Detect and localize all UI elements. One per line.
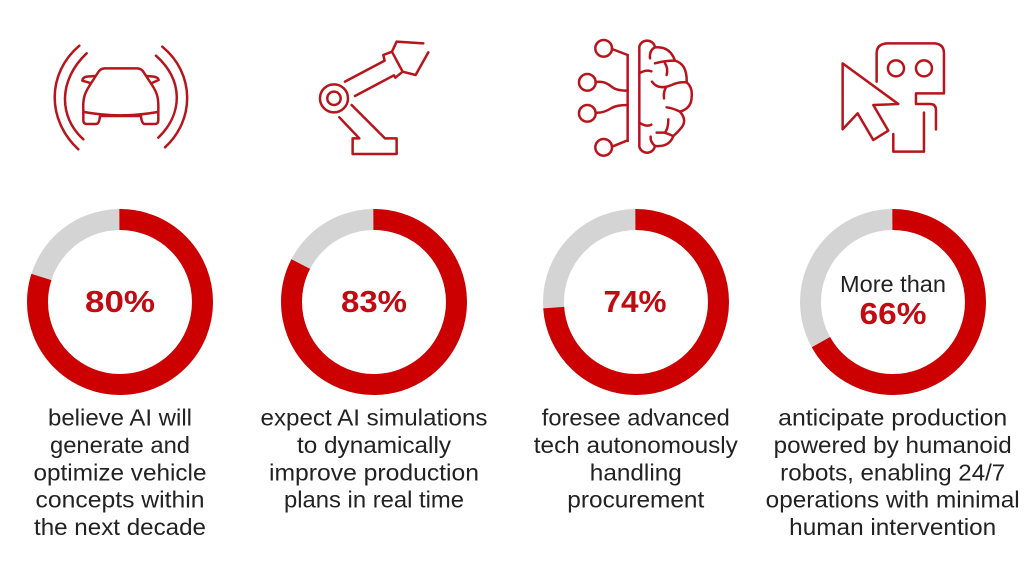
text block: procurement <box>534 404 738 512</box>
text block: humanoid robots: robots, enabling 24/7 <box>780 460 1005 486</box>
icon: cursor and robot head <box>843 43 944 152</box>
text block: vehicle concepts: the next decade <box>34 514 206 540</box>
text block: humanoid robots: anticipate production <box>778 404 1007 430</box>
donut chart: more than 66% <box>810 220 976 384</box>
donut chart: 83% <box>292 220 456 384</box>
donut chart: 80% <box>38 220 202 384</box>
text block: production plans <box>260 404 488 512</box>
icon: robotic arm <box>320 42 428 154</box>
text block: humanoid robots: human intervention <box>789 514 996 540</box>
text block: humanoid robots: operations with minimal <box>766 486 1020 512</box>
text block: vehicle concepts: optimize vehicle <box>34 460 206 486</box>
donut chart: 74%: 74% <box>604 284 666 319</box>
text block: vehicle concepts: generate and <box>50 432 190 458</box>
text block: vehicle concepts: believe AI will <box>48 404 192 430</box>
text block: vehicle concepts <box>34 404 206 540</box>
text block: humanoid robots: powered by humanoid <box>774 432 1012 458</box>
text block: procurement: handling <box>590 460 682 486</box>
donut chart: more than 66%: More than <box>840 271 946 297</box>
donut chart: more than 66%: 66% <box>860 296 926 331</box>
icon: brain with circuit nodes <box>579 40 692 156</box>
text block: production plans: improve production <box>269 460 479 486</box>
text block: procurement: tech autonomously <box>534 432 738 458</box>
donut chart: 83%: 83% <box>341 284 407 319</box>
text block: production plans: to dynamically <box>297 432 452 458</box>
icon: car with sensor waves <box>55 46 187 149</box>
text block: humanoid robots <box>766 404 1020 540</box>
text block: production plans: plans in real time <box>284 486 464 512</box>
donut chart: 80%: 80% <box>85 284 155 319</box>
text block: procurement: foresee advanced <box>542 404 730 430</box>
text block: procurement: procurement <box>567 486 705 512</box>
text block: production plans: expect AI simulations <box>260 404 488 430</box>
text block: vehicle concepts: concepts within <box>36 486 204 512</box>
donut chart: 74% <box>554 220 718 384</box>
